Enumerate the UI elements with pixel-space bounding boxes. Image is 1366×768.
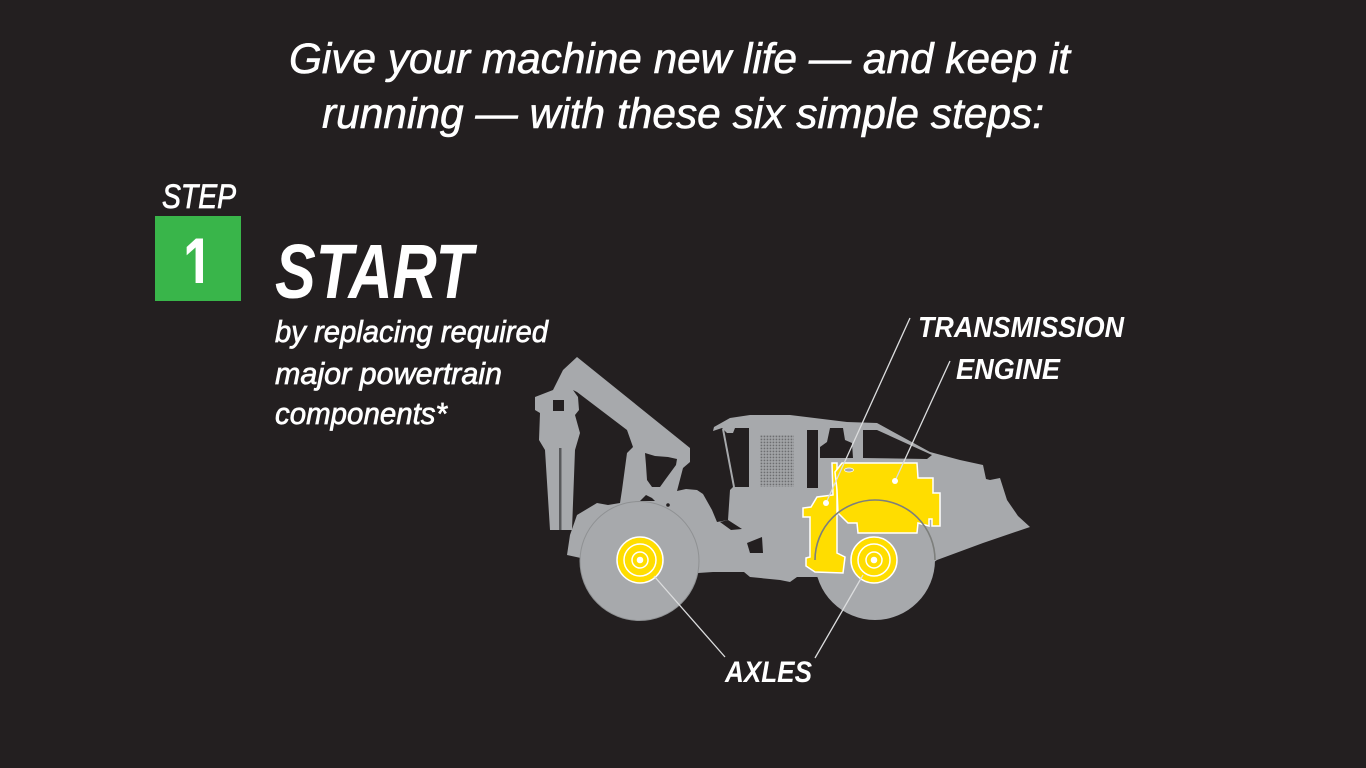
title	[289, 35, 1072, 138]
machine illustration: skidder	[535, 357, 1030, 620]
label: transmission: TRANSMISSION	[918, 312, 1125, 344]
description text: components*	[275, 396, 448, 431]
rear wheel	[580, 502, 699, 620]
rear axle hub	[617, 537, 663, 583]
leader line: engine	[892, 361, 950, 484]
engine detail	[844, 468, 854, 472]
step label: STEP	[162, 178, 236, 216]
heading: start: START	[275, 229, 478, 315]
front wheel outline	[815, 500, 935, 560]
label: engine: ENGINE	[956, 354, 1062, 386]
cab strut	[723, 429, 734, 487]
description text: major powertrain	[275, 356, 502, 391]
leader lines: axles	[654, 575, 863, 658]
title: running — with these six simple steps:	[322, 90, 1044, 138]
boom and body cut-outs	[553, 400, 932, 553]
machine body silhouette	[535, 357, 1030, 600]
transmission: yellow component	[803, 463, 845, 573]
label: axles: AXLES	[724, 656, 812, 689]
description text: by replacing required	[275, 314, 550, 349]
engine: yellow component	[835, 463, 940, 533]
description text	[275, 314, 550, 431]
cab grille	[760, 435, 794, 487]
leader line: transmission	[823, 318, 910, 506]
step number badge	[155, 216, 241, 308]
front axle hub	[851, 537, 897, 583]
title: Give your machine new life — and keep it	[289, 35, 1072, 83]
front wheel	[815, 500, 935, 620]
step number badge: 1	[183, 223, 213, 308]
